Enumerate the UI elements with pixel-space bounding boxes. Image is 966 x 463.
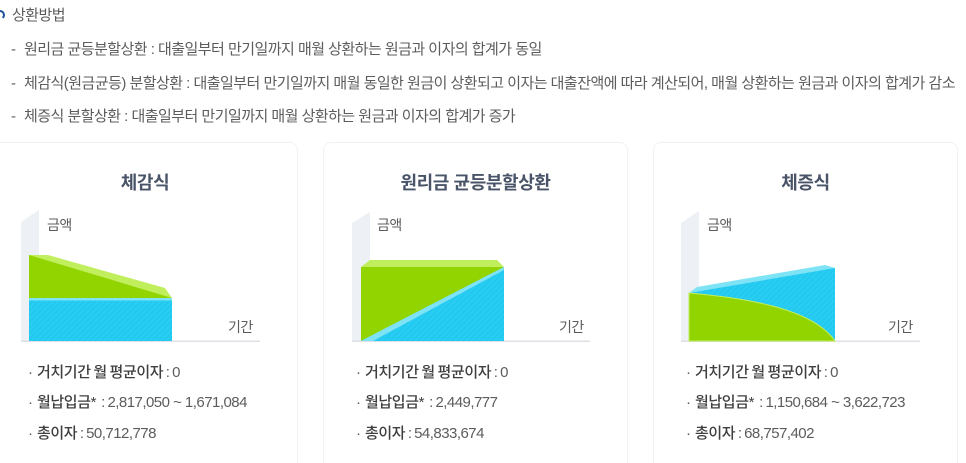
axis label: 기간: 기간 [228, 319, 253, 335]
card background [0, 142, 298, 463]
stat: total interest: 총이자 : 54,833,674 [365, 425, 484, 442]
item: decreasing: 체감식(원금균등) 분할상환 : 대출일부터 만기일까지 매월 동일한 원금이 상환되고 이자는 대출잔액에 따라 계산되어, 매월 상환하는 원금과 이자의 합계가 감소 [24, 75, 955, 92]
stat: total interest: 총이자 : 50,712,778 [37, 425, 156, 442]
axis label: 금액: 금액 [47, 217, 72, 233]
card background [653, 142, 958, 463]
stat: monthly payment: 월납입금* : 1,150,684 ~ 3,622,723 [695, 394, 905, 411]
stat: total interest: 총이자 : 68,757,402 [695, 425, 814, 442]
heading: 상환방법: 상환방법 [12, 7, 65, 24]
stat: monthly payment: · [686, 394, 690, 411]
item: decreasing: - [11, 75, 15, 92]
heading: 원리금 균등분할상환 [400, 173, 551, 193]
stat: grace period: · [356, 364, 360, 381]
stat: grace period: · [686, 364, 690, 381]
item: increasing: 체증식 분할상환 : 대출일부터 만기일까지 매월 상환하는 원금과 이자의 합계가 증가 [24, 108, 515, 125]
stat: grace period: 거치기간 월 평균이자 : 0 [37, 364, 180, 381]
card background [323, 142, 628, 463]
chart: increasing [681, 211, 920, 342]
axis label: 금액: 금액 [707, 217, 732, 233]
stat: monthly payment: · [356, 394, 360, 411]
stat: total interest: · [686, 425, 690, 442]
axis label: 기간: 기간 [559, 319, 584, 335]
stat: monthly payment: 월납입금* : 2,817,050 ~ 1,671,084 [37, 394, 247, 411]
heading: 체증식 [781, 173, 830, 193]
chart: equal payment [352, 212, 590, 342]
chart: decreasing [21, 210, 260, 342]
panel: 원리금 균등분할상환 [323, 142, 628, 463]
item: equal principal and interest: - [11, 41, 15, 58]
stat: monthly payment: · [28, 394, 32, 411]
stat: monthly payment: 월납입금* : 2,449,777 [365, 394, 497, 411]
stat: total interest: · [28, 425, 32, 442]
heading: 체감식 [121, 173, 169, 193]
stat: grace period: 거치기간 월 평균이자 : 0 [695, 364, 838, 381]
section icon [0, 10, 5, 20]
axis label: 기간: 기간 [888, 319, 913, 335]
panel: 체증식 [653, 142, 958, 463]
axis label: 금액: 금액 [377, 217, 402, 233]
item: increasing: - [11, 108, 15, 125]
stat: grace period: 거치기간 월 평균이자 : 0 [365, 364, 508, 381]
item: equal principal and interest: 원리금 균등분할상환 : 대출일부터 만기일까지 매월 상환하는 원금과 이자의 합계가 동일 [24, 41, 542, 58]
panel: 체감식 [0, 142, 298, 463]
stat: total interest: · [356, 425, 360, 442]
text block: repayment methods [11, 41, 955, 125]
stat: grace period: · [28, 364, 32, 381]
